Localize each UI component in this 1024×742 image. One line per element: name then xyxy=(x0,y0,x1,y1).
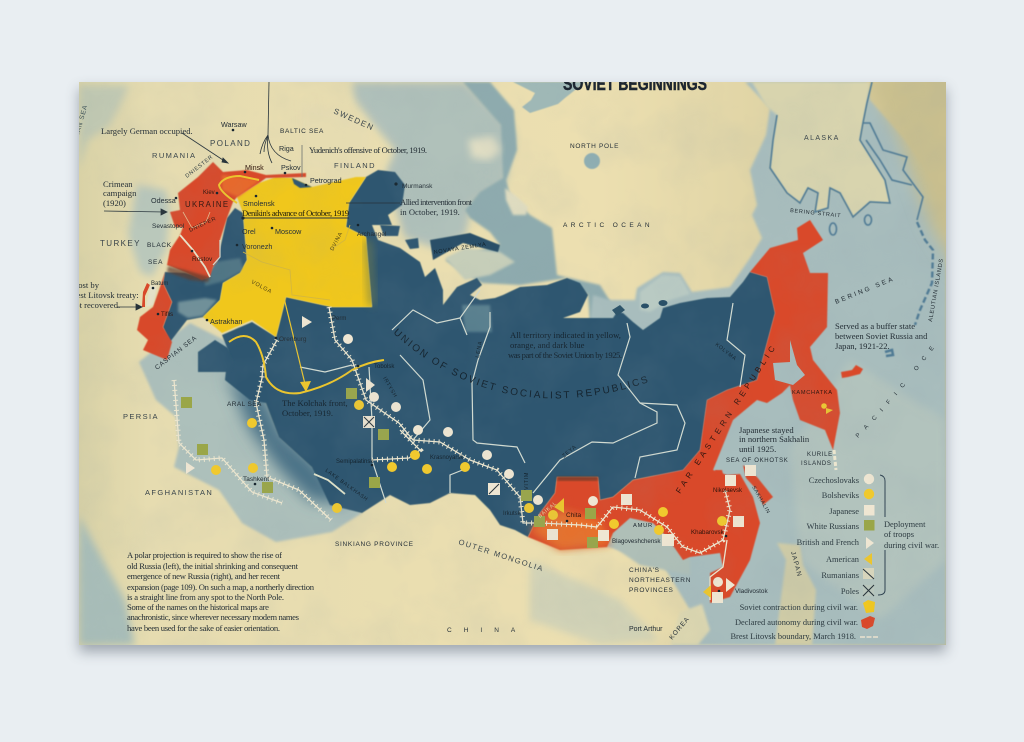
map labels: cities: Kiev xyxy=(203,190,215,196)
map labels: countries and seas: OUTER MONGOLIA xyxy=(457,537,545,573)
map labels: rivers and regions: IRTYSH xyxy=(381,376,398,399)
markers: Czechoslovaks xyxy=(343,334,723,587)
explanatory paragraph: expansion (page 109). On such a map, a northerly direction xyxy=(127,582,315,592)
map labels: cities: Krasnoyarsk xyxy=(430,455,464,461)
rivers xyxy=(213,225,745,503)
map labels: countries and seas xyxy=(79,106,943,640)
map labels: countries and seas: NORTH POLE xyxy=(570,143,619,150)
map labels: cities: Tobolsk xyxy=(374,364,395,370)
map labels: cities: Perm xyxy=(332,316,346,322)
markers: White Russians xyxy=(181,388,598,548)
explanatory paragraph: is a straight line from any spot to the North Pole. xyxy=(127,592,284,602)
map labels: cities: Khabarovsk xyxy=(691,529,725,536)
map labels: countries and seas: ALASKA xyxy=(804,135,840,142)
map labels: countries and seas: PACIFIC OCEAN xyxy=(855,346,934,438)
annotations: Japan, 1921-22. xyxy=(835,341,890,351)
map labels: countries and seas: NOVAYA ZEMLYA xyxy=(433,242,487,256)
map labels: cities: Murmansk xyxy=(402,183,433,190)
map labels: countries and seas: SAKHALIN xyxy=(750,485,771,515)
map labels: rivers and regions: UKRAINE xyxy=(185,200,229,209)
annotations: orange, and dark blue xyxy=(510,340,585,350)
annotations: Largely German occupied. xyxy=(101,126,193,136)
sea and ocean washes xyxy=(79,75,960,645)
map labels: rivers and regions: DVINA xyxy=(329,231,344,252)
explanatory paragraph xyxy=(127,550,315,633)
Kolchak front line and advance arrows xyxy=(219,176,384,393)
legend labels: British and French xyxy=(797,538,860,547)
map labels: cities: Sevastopol xyxy=(152,223,185,230)
city dots xyxy=(152,129,727,592)
map labels: cities: Voronezh xyxy=(242,242,272,251)
troop markers xyxy=(181,316,833,603)
explanatory paragraph: old Russia (left), the initial shrinking and consequent xyxy=(127,561,299,571)
paper mottling texture xyxy=(128,125,932,630)
map labels: countries and seas: PROVINCES xyxy=(629,587,674,594)
map labels: countries and seas: SEA xyxy=(148,259,163,266)
explanatory paragraph: emergence of new Russia (right), and her recent xyxy=(127,571,281,581)
markers: American xyxy=(554,408,833,598)
legend labels: Czechoslovaks xyxy=(809,476,859,485)
map labels: rivers and regions: DNIEPER xyxy=(188,216,217,234)
big label: Far Eastern Republic: FAR EASTERN REPUBLIC xyxy=(676,346,774,494)
title: SOVIET BEGINNINGS xyxy=(563,74,707,94)
explanatory paragraph: Some of the names on the historical maps are xyxy=(127,602,269,612)
map labels: cities: Smolensk xyxy=(243,199,275,208)
legend labels: Brest Litovsk boundary, March 1918. xyxy=(730,632,856,641)
map labels: countries and seas: RUMANIA xyxy=(152,151,196,160)
map labels: cities: Minsk xyxy=(245,163,264,172)
annotations: was part of the Soviet Union by 1925. xyxy=(508,350,622,360)
map labels: cities: Batum xyxy=(151,281,168,287)
legend labels: Soviet contraction during civil war. xyxy=(740,603,858,612)
annotations: Japanese stayed xyxy=(739,425,794,435)
map labels: rivers and regions: LENA xyxy=(475,340,484,358)
map labels: cities: Chita xyxy=(566,512,582,519)
map panel background shadow xyxy=(79,82,946,645)
annotations: Allied intervention front xyxy=(400,197,473,207)
map labels: countries and seas: BERING SEA xyxy=(834,275,896,306)
legend labels: American xyxy=(826,555,860,564)
explanatory paragraph: have been used for the sake of easier orientation. xyxy=(127,623,280,633)
map labels: countries and seas: CHINA xyxy=(447,627,527,634)
map labels: countries and seas: BLACK xyxy=(147,242,172,249)
markers: British and French xyxy=(186,316,735,592)
map labels: cities: Tiflis xyxy=(161,312,173,318)
map labels: cities: Moscow xyxy=(275,227,302,236)
legend labels: Rumanians xyxy=(821,571,859,580)
map labels: countries and seas: POLAND xyxy=(210,139,251,148)
map labels: countries and seas: TURKEY xyxy=(100,239,141,248)
map labels: cities: Orel xyxy=(242,227,256,236)
territory: declared autonomy, west (Ukraine and Caucasus) xyxy=(137,162,306,360)
map labels: countries and seas: JAPAN xyxy=(789,551,803,578)
legend: of troops xyxy=(884,530,914,539)
legend symbols xyxy=(860,474,878,637)
map labels: cities: Riga xyxy=(279,144,294,153)
map paper xyxy=(79,82,946,645)
annotations: Denikin's advance of October, 1919 xyxy=(242,208,349,218)
map labels: countries and seas: FINLAND xyxy=(334,161,376,170)
map labels: countries and seas: PERSIA xyxy=(123,412,159,421)
infographic map xyxy=(79,82,946,645)
map labels: rivers and regions: KAMCHATKA xyxy=(792,390,833,396)
legend xyxy=(730,474,939,641)
annotations: Brest Litovsk treaty: xyxy=(68,290,139,300)
map labels: countries and seas: AFGHANISTAN xyxy=(145,488,213,497)
map labels: cities: Pskov xyxy=(281,163,301,172)
map labels: cities: Tashkent xyxy=(243,476,269,483)
map labels: cities: Archangel xyxy=(357,231,387,238)
annotations: Served as a buffer state xyxy=(835,321,915,331)
map labels: rivers and regions: LAKE BALKHASH xyxy=(324,468,369,503)
legend labels xyxy=(730,476,860,641)
map labels: countries and seas: BALTIC SEA xyxy=(280,128,324,135)
markers: Rumanian xyxy=(488,483,500,495)
map labels: countries and seas: ALEUTIAN ISLANDS xyxy=(928,258,945,322)
big label: Union of Soviet Socialist Republics: UNION OF SOVIET SOCIALIST REPUBLICS xyxy=(394,328,648,398)
map labels: cities: Irkutsk xyxy=(503,511,522,517)
annotations xyxy=(68,126,928,454)
map labels: rivers and regions: ZEYA xyxy=(561,444,578,460)
map labels: rivers and regions: KOLYMA xyxy=(714,342,738,362)
map labels: countries and seas: TYRRHENIAN SEA xyxy=(65,104,89,171)
map labels: rivers and regions: DNIESTER xyxy=(185,154,215,180)
map labels: countries and seas: BERING STRAIT xyxy=(790,208,841,219)
map labels: countries and seas: SWEDEN xyxy=(332,107,376,133)
annotations: Crimean xyxy=(103,179,133,189)
legend labels: Declared autonomy during civil war. xyxy=(735,618,858,627)
map labels: cities: Vladivostok xyxy=(735,588,768,595)
explanatory paragraph: anachronistic, since wherever necessary modern names xyxy=(127,612,300,622)
bracket xyxy=(878,475,885,595)
map labels: cities: Warsaw xyxy=(221,120,247,129)
map labels: countries and seas: CHINA'S xyxy=(629,567,660,574)
annotations: in October, 1919. xyxy=(400,207,460,217)
annotations: The Kolchak front, xyxy=(282,398,348,408)
territory: Far Eastern Republic red xyxy=(528,220,863,603)
annotations: in northern Sakhalin xyxy=(739,434,810,444)
legend: Deployment xyxy=(884,520,926,529)
map labels: countries and seas: ISLANDS xyxy=(801,461,832,467)
map labels: cities: Nikolaevsk xyxy=(713,488,743,494)
map labels: countries and seas: Port Arthur xyxy=(629,626,663,633)
map labels: countries and seas: SINKIANG PROVINCE xyxy=(335,541,414,548)
map labels: rivers and regions: BAIKAL xyxy=(537,501,558,520)
markers: Poles xyxy=(363,416,375,428)
coast lines of Alaska and Aleutian Islands xyxy=(770,82,933,356)
markers: Bolsheviks xyxy=(211,400,827,535)
map labels: countries and seas: ARCTIC OCEAN xyxy=(563,222,653,229)
map labels: cities: Petrograd xyxy=(310,176,342,185)
legend labels: Poles xyxy=(841,587,859,596)
map labels: cities: Odessa xyxy=(151,196,176,205)
map labels: countries and seas: NORTHEASTERN xyxy=(629,577,691,584)
map labels: countries and seas: KURILE xyxy=(807,452,833,458)
map labels: countries and seas: SEA OF OKHOTSK xyxy=(726,458,788,464)
annotations: Lost by xyxy=(73,280,100,290)
territory: Soviet Union dark blue xyxy=(163,170,775,537)
explanatory paragraph: A polar projection is required to show the rise of xyxy=(127,550,282,560)
annotations: (1920) xyxy=(103,198,126,208)
annotations: between Soviet Russia and xyxy=(835,331,928,341)
annotations: Yudenich's offensive of October, 1919. xyxy=(309,145,427,155)
map labels: countries and seas: ARAL SEA xyxy=(227,401,262,408)
map labels: cities: Astrakhan xyxy=(210,317,242,326)
annotations: until 1925. xyxy=(739,444,776,454)
map labels: rivers and regions xyxy=(185,156,832,518)
map labels: cities: Semipalatinsk xyxy=(336,459,374,465)
map labels: cities: Blagoveshchensk xyxy=(612,538,661,545)
legend: during civil war. xyxy=(884,541,939,550)
legend labels: Bolsheviks xyxy=(822,491,859,500)
map labels: countries and seas: KOREA xyxy=(668,616,691,641)
map labels: cities: Orenburg xyxy=(279,336,307,343)
annotations: October, 1919. xyxy=(282,408,333,418)
legend labels: Japanese xyxy=(829,507,859,516)
annotations: All territory indicated in yellow, xyxy=(510,330,621,340)
annotations: not recovered. xyxy=(71,300,120,310)
annotations: campaign xyxy=(103,188,137,198)
railway lines: Brest Litovsk boundary and routes xyxy=(174,307,836,600)
territory: Soviet contraction yellow xyxy=(203,177,376,345)
annotation arrows xyxy=(104,82,400,310)
map labels: rivers and regions: VITIM xyxy=(524,472,530,490)
markers: Japanese xyxy=(547,465,756,603)
map labels: cities xyxy=(151,120,768,595)
map labels: countries and seas: CASPIAN SEA xyxy=(154,335,198,372)
map labels: rivers and regions: VOLGA xyxy=(250,279,273,295)
legend labels: White Russians xyxy=(807,522,859,531)
map labels: cities: Rostov xyxy=(192,256,213,263)
map labels: countries and seas: AMUR xyxy=(633,523,653,529)
